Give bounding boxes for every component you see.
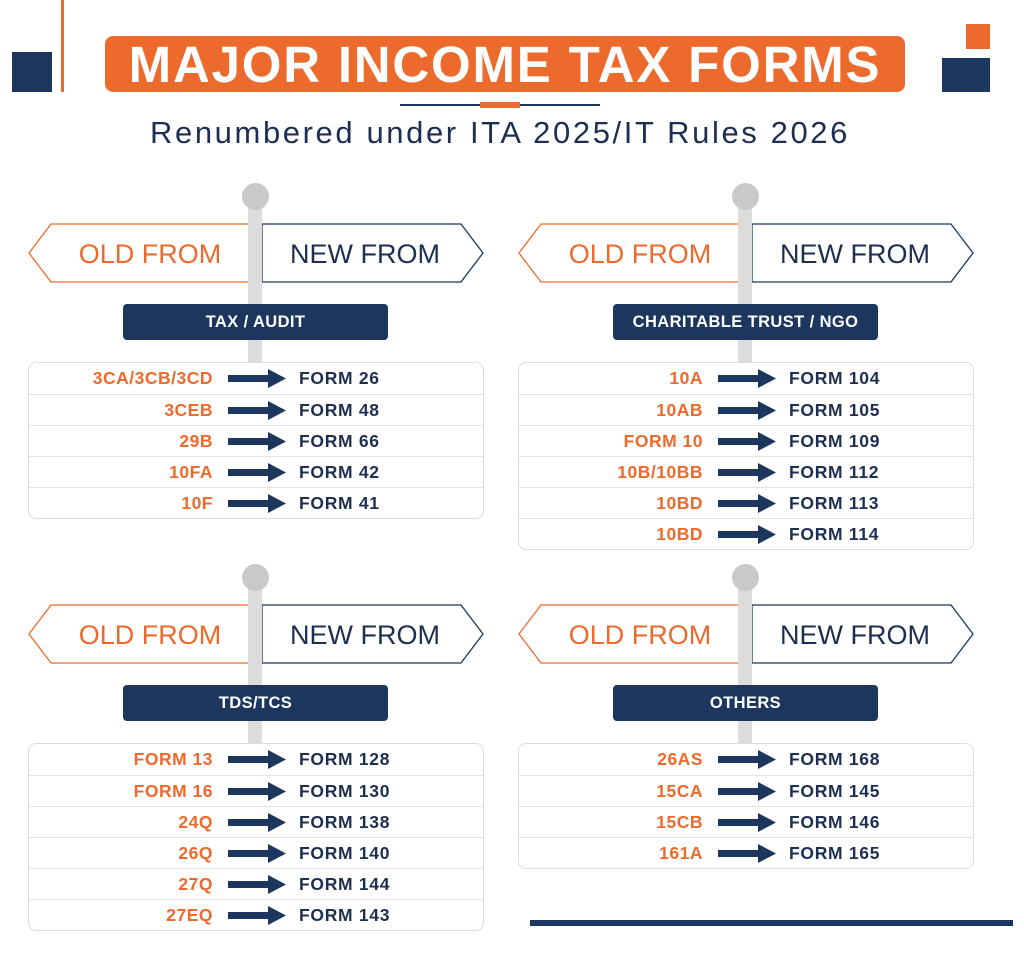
decor: navy square right xyxy=(942,58,990,92)
table: FORM 42 xyxy=(299,462,380,482)
title: MAJOR INCOME TAX FORMS xyxy=(129,36,881,93)
table: FORM 41 xyxy=(299,493,380,513)
category heading: TAX / AUDIT xyxy=(206,313,305,331)
category heading: TDS/TCS xyxy=(219,694,292,712)
table: FORM 128 xyxy=(299,749,390,769)
table: FORM 143 xyxy=(299,905,390,925)
table: 15CB xyxy=(656,812,703,832)
table: 10F xyxy=(181,493,213,513)
table: FORM 48 xyxy=(299,400,380,420)
table: 3CEB xyxy=(164,400,213,420)
category heading xyxy=(123,304,388,340)
table: 10BD xyxy=(656,524,703,544)
table: FORM 165 xyxy=(789,843,880,863)
table: 24Q xyxy=(178,812,213,832)
table: FORM 104 xyxy=(789,368,880,388)
decor: navy square left xyxy=(12,52,52,92)
subtitle: Renumbered under ITA 2025/IT Rules 2026 xyxy=(150,115,850,150)
panel: charitable trust / ngo: OLD FROM xyxy=(569,239,711,269)
table: FORM 144 xyxy=(299,874,390,894)
table: 26Q xyxy=(178,843,213,863)
table: FORM 105 xyxy=(789,400,880,420)
table: FORM 140 xyxy=(299,843,390,863)
category heading: CHARITABLE TRUST / NGO xyxy=(633,313,858,331)
category heading xyxy=(613,304,878,340)
table xyxy=(518,743,974,869)
table: FORM 168 xyxy=(789,749,880,769)
panel: tds/tcs xyxy=(28,564,484,931)
table: FORM 66 xyxy=(299,431,380,451)
signpost xyxy=(518,223,974,283)
title underline xyxy=(400,102,600,108)
table: 10A xyxy=(669,368,703,388)
table: FORM 114 xyxy=(789,524,879,544)
decor: orange vertical line xyxy=(61,0,64,92)
table: FORM 16 xyxy=(134,781,213,801)
table xyxy=(28,362,484,519)
panel: tax / audit: NEW FROM xyxy=(290,239,440,269)
table: FORM 109 xyxy=(789,431,880,451)
panel: charitable trust / ngo: NEW FROM xyxy=(780,239,930,269)
panel: others: NEW FROM xyxy=(780,620,930,650)
decor: bottom navy line xyxy=(530,920,1013,926)
table xyxy=(518,362,974,550)
table: 10BD xyxy=(656,493,703,513)
table: 10B/10BB xyxy=(617,462,703,482)
table: FORM 146 xyxy=(789,812,880,832)
panel: tax / audit xyxy=(28,183,484,519)
category heading: OTHERS xyxy=(710,694,781,712)
table: FORM 138 xyxy=(299,812,390,832)
table: 29B xyxy=(179,431,213,451)
category heading xyxy=(123,685,388,721)
signpost xyxy=(28,223,484,283)
panel: others xyxy=(518,564,974,869)
table: 26AS xyxy=(657,749,703,769)
table: 15CA xyxy=(656,781,703,801)
table: FORM 145 xyxy=(789,781,880,801)
table: FORM 10 xyxy=(624,431,703,451)
table: 161A xyxy=(659,843,703,863)
category heading xyxy=(613,685,878,721)
table: FORM 26 xyxy=(299,368,380,388)
decor: orange square right xyxy=(966,24,990,49)
table: 3CA/3CB/3CD xyxy=(93,368,213,388)
table xyxy=(28,743,484,931)
panel: charitable trust / ngo xyxy=(518,183,974,550)
table: FORM 130 xyxy=(299,781,390,801)
table: 27Q xyxy=(178,874,213,894)
panel: others: OLD FROM xyxy=(569,620,711,650)
table: FORM 112 xyxy=(789,462,879,482)
table: 10FA xyxy=(169,462,213,482)
signpost xyxy=(28,604,484,664)
panel: tds/tcs: NEW FROM xyxy=(290,620,440,650)
table: 10AB xyxy=(656,400,703,420)
table: 27EQ xyxy=(166,905,213,925)
table: FORM 13 xyxy=(134,749,213,769)
panel: tax / audit: OLD FROM xyxy=(79,239,221,269)
signpost xyxy=(518,604,974,664)
table: FORM 113 xyxy=(789,493,879,513)
panel: tds/tcs: OLD FROM xyxy=(79,620,221,650)
